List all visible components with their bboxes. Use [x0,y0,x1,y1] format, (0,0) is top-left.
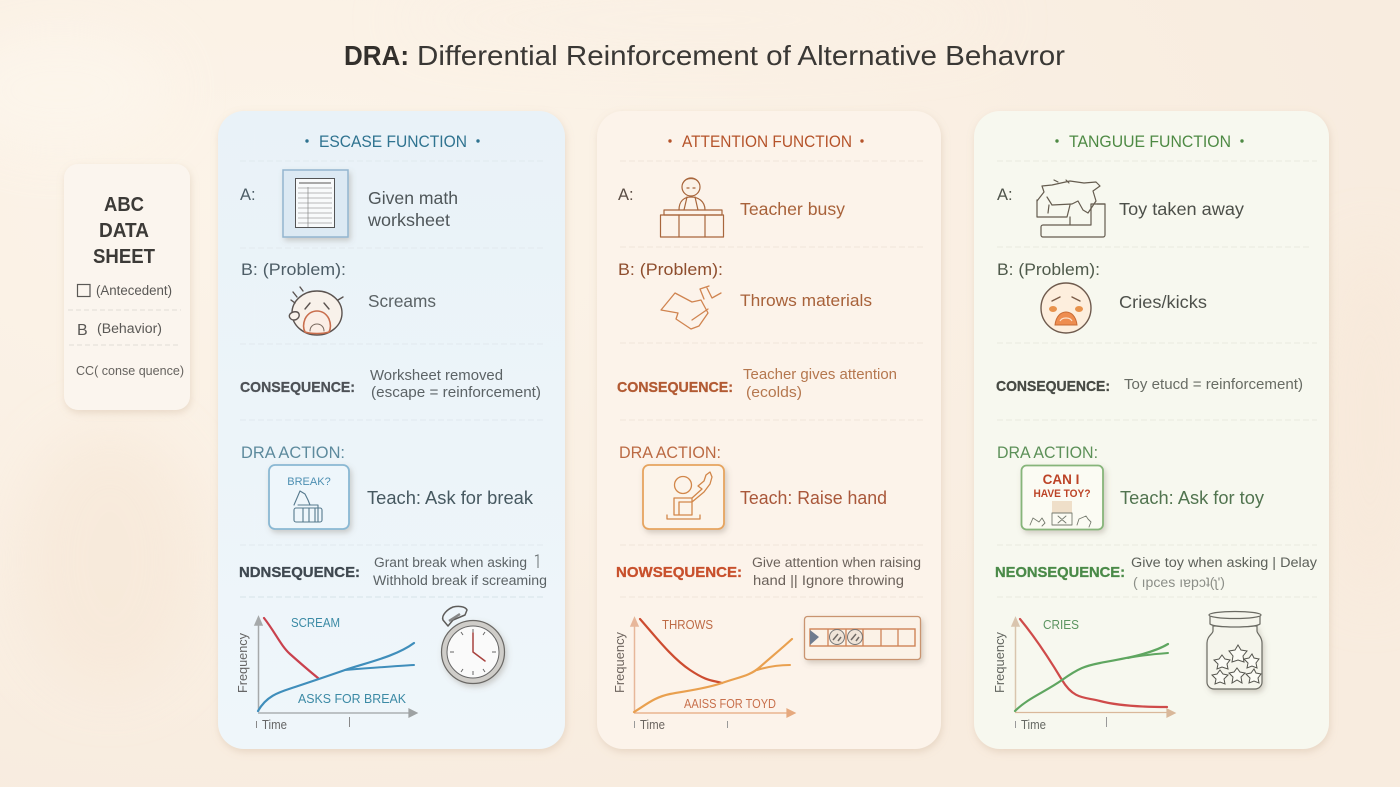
panel: escape function [218,111,565,749]
consequence text: Worksheet removed [370,368,503,384]
DRA action label: DRA ACTION: [241,443,345,462]
DRA action text: Teach: Ask for break [367,488,534,508]
DRA action label: DRA ACTION: [619,443,721,462]
new consequence label: NDNSEQUENCE: [239,564,360,581]
line chart: scream vs asks for break: Time [262,718,287,732]
new consequence text [373,555,547,588]
icon: star jar [1207,612,1262,689]
line chart: scream vs asks for break: Frequency [235,633,250,693]
line chart: throws vs asks for attention: Frequency [612,632,627,693]
icon: can I have toy card [1022,466,1103,530]
new consequence text: ( ıpces ıɐpɔʇ(ʅ') [1133,575,1225,590]
behavior text: Screams [368,291,436,311]
icon: raised hand card [643,465,724,529]
new consequence label: NOWSEQUENCE: [616,564,742,581]
heading: ABC data sheet: ABC [104,194,144,216]
icon: math worksheet [283,170,348,237]
heading: ABC data sheet: DATA [99,220,149,242]
heading: tangible function: TANGUUE FUNCTION [1069,133,1231,151]
consequence text: Toy etucd = reinforcement) [1124,377,1303,393]
panel: attention function [597,111,941,749]
new consequence text: Grant break when asking [374,555,527,570]
behavior row [77,321,162,339]
line chart: throws vs asks for attention: AAISS FOR TOYD [684,696,776,711]
behavior text: Cries/kicks [1119,292,1207,312]
antecedent text: Toy taken away [1119,199,1244,219]
antecedent text: worksheet [367,210,450,230]
line chart: scream vs asks for break [235,616,417,732]
icon: teacher at desk [660,178,724,237]
line chart: scream vs asks for break: SCREAM [291,616,340,630]
antecedent label: A: [240,186,256,204]
consequence text [370,368,541,401]
icon: throwing materials [661,286,721,329]
icon: crying face [1041,283,1091,333]
heading: escape function: ESCASE FUNCTION [319,133,467,151]
line chart: scream vs asks for break: ASKS FOR BREAK [298,691,406,706]
icon: can I have toy card: HAVE TOY? [1034,488,1091,500]
behavior label: B: (Problem): [618,260,723,279]
icon: token board [804,616,920,660]
line chart: cries vs asks for toy [992,618,1175,732]
behavior row: (Behavior) [97,321,162,336]
new consequence text: hand || Ignore throwing [753,573,904,588]
antecedent text: Given math [368,188,458,208]
line chart: throws vs asks for attention [612,618,795,732]
title: DRA: [344,40,409,71]
behavior label: B: (Problem): [997,260,1100,279]
new consequence text [1131,555,1317,590]
heading: attention function: ATTENTION FUNCTION [682,133,852,151]
behavior label: B: (Problem): [241,260,346,279]
consequence label: CONSEQUENCE: [617,379,733,396]
new consequence text: Give attention when raising [752,555,921,570]
line chart: cries vs asks for toy: CRIES [1043,618,1079,632]
panel: ABC data sheet [64,164,190,410]
antecedent label: A: [997,186,1013,204]
antecedent text: Teacher busy [740,199,845,219]
consequence text [743,367,897,401]
panel: tangible function [974,111,1329,749]
new consequence text: Withhold break if screaming [373,573,547,588]
DRA action text: Teach: Raise hand [740,488,887,508]
line chart: throws vs asks for attention: Time [640,718,665,732]
consequence label: CONSEQUENCE: [996,378,1110,395]
behavior text: Throws materials [740,291,872,310]
behavior row: B [77,322,88,339]
DRA action text: Teach: Ask for toy [1120,488,1264,508]
consequence label: CONSEQUENCE: [240,379,355,396]
title: Differential Reinforcement of Alternative Behavror [417,40,1065,71]
icon: toy taken away [1037,180,1105,237]
heading: ABC data sheet [93,194,155,268]
icon: stopwatch [442,606,504,684]
new consequence text [752,555,921,588]
heading: ABC data sheet: SHEET [93,246,155,268]
new consequence text: Give toy when asking | Delay [1131,555,1317,570]
line chart: throws vs asks for attention: THROWS [662,618,713,632]
icon: can I have toy card: CAN I [1043,472,1079,487]
line chart: cries vs asks for toy: Time [1021,718,1046,732]
icon: screaming face [289,287,343,335]
consequence row: CC( conse quence) [76,363,184,378]
icon: break card: BREAK? [287,476,331,488]
consequence text: (ecolds) [746,385,802,401]
new consequence label: NEONSEQUENCE: [995,564,1125,581]
consequence text: Teacher gives attention [743,367,897,383]
antecedent label: A: [618,186,634,204]
line chart: cries vs asks for toy: Frequency [992,632,1007,693]
antecedent row: (Antecedent) [96,283,172,298]
icon: break card [269,465,349,529]
antecedent text [367,188,458,230]
consequence text: (escape = reinforcement) [371,385,541,401]
DRA action label: DRA ACTION: [997,443,1098,462]
